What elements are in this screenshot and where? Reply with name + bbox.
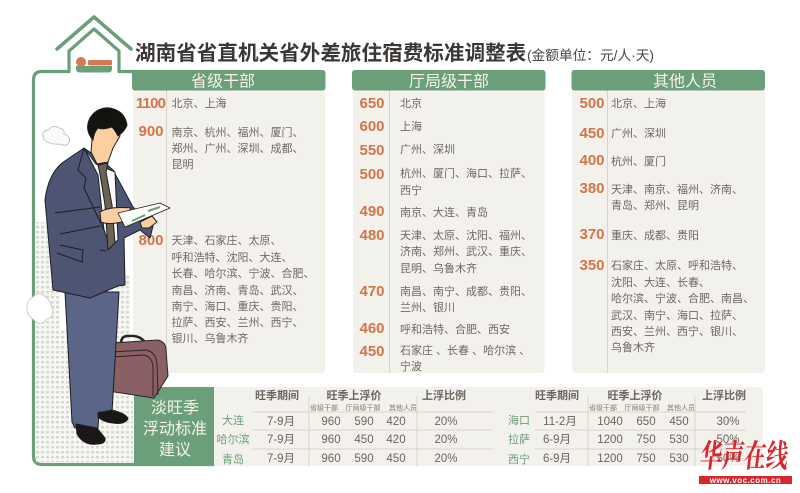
heading: department-level officials bbox=[352, 70, 546, 90]
table rows: right: 50% bbox=[716, 453, 740, 465]
tie bbox=[98, 163, 115, 250]
rates: provincial officials: 南宁、海口、重庆、贵阳、 bbox=[172, 299, 304, 313]
table rows: right: 530 bbox=[669, 453, 689, 465]
table rows: right: 1200 bbox=[597, 434, 623, 446]
table rows: left: 960 bbox=[321, 453, 341, 465]
rates: department-level officials: 南昌、南宁、成都、贵阳、 bbox=[400, 284, 532, 298]
rates: other personnel: 武汉、南宁、海口、拉萨、 bbox=[611, 308, 743, 322]
table rows: left: 420 bbox=[386, 416, 406, 428]
rates: other personnel: 400 bbox=[579, 152, 605, 169]
table rows: right: 30% bbox=[716, 416, 740, 428]
watermark logo: 华声在线 bbox=[698, 430, 792, 476]
table rows: right: 海口 bbox=[508, 413, 530, 427]
rates: other personnel: 500 bbox=[579, 95, 605, 112]
rates: department-level officials: 500 bbox=[359, 166, 385, 183]
rates: other personnel: 380 bbox=[579, 180, 605, 197]
table headers: left: 上浮比例 bbox=[422, 388, 466, 402]
table rows: left: 450 bbox=[386, 453, 406, 465]
illustration: briefcase bbox=[108, 336, 168, 398]
rates: other personnel: 350 bbox=[579, 257, 605, 274]
table rows: left: 20% bbox=[434, 416, 458, 428]
rates: provincial officials: 银川、乌鲁木齐 bbox=[172, 331, 248, 345]
table rows: right: 6-9月 bbox=[543, 453, 571, 465]
rates: provincial officials: 南京、杭州、福州、厦门、 bbox=[172, 125, 304, 139]
table rows: right: 西宁 bbox=[508, 452, 530, 466]
shoes bbox=[76, 410, 128, 444]
panel: other personnel bbox=[572, 70, 765, 373]
rates: department-level officials: 470 bbox=[359, 283, 385, 300]
rates: other personnel bbox=[579, 95, 754, 354]
rates: department-level officials: 石家庄 、长春 、哈尔滨 、 bbox=[400, 343, 530, 357]
table headers: right: 上浮比例 bbox=[702, 388, 746, 402]
rates: other personnel: 广州、深圳 bbox=[611, 127, 666, 140]
house frame bbox=[34, 17, 214, 464]
rates: department-level officials: 600 bbox=[359, 118, 385, 135]
title: 湖南省省直机关省外差旅住宿费标准调整表 bbox=[135, 41, 527, 65]
rates: provincial officials: 1100 bbox=[136, 95, 166, 112]
rates: other personnel: 450 bbox=[579, 125, 605, 142]
heading: department-level officials: 厅局级干部 bbox=[409, 72, 489, 90]
rates: provincial officials bbox=[136, 95, 314, 345]
table rows: left: 20% bbox=[434, 434, 458, 446]
rates: department-level officials: 西宁 bbox=[400, 183, 422, 197]
table rows: right: 拉萨 bbox=[508, 432, 530, 446]
table rows: right: 450 bbox=[669, 416, 689, 428]
rates: department-level officials: 呼和浩特、合肥、西安 bbox=[400, 322, 510, 336]
table rows: left: 7-9月 bbox=[267, 434, 295, 446]
table headers: left: 省级干部 bbox=[310, 403, 338, 412]
table headers: right: 旺季期间 bbox=[535, 388, 579, 402]
watermark logo: www.voc.com.cn bbox=[709, 476, 781, 485]
label box: off-peak floating rates bbox=[134, 387, 214, 466]
table rows: right bbox=[508, 413, 740, 466]
table rows: right: 530 bbox=[669, 434, 689, 446]
rates: department-level officials: 460 bbox=[359, 320, 385, 337]
rates: department-level officials: 480 bbox=[359, 227, 385, 244]
rates: other personnel: 沈阳、大连、长春、 bbox=[611, 275, 710, 289]
rates: other personnel: 杭州、厦门 bbox=[611, 154, 666, 168]
icon: white puff cloud bbox=[27, 294, 53, 323]
table rows: left: 960 bbox=[321, 434, 341, 446]
table rows: left: 590 bbox=[354, 416, 374, 428]
table rows: right: 750 bbox=[636, 453, 656, 465]
rates: other personnel: 哈尔滨、宁波、合肥、南昌、 bbox=[611, 291, 754, 305]
rates: provincial officials: 长春、哈尔滨、宁波、合肥、 bbox=[172, 266, 314, 280]
rates: department-level officials: 650 bbox=[359, 95, 385, 112]
shirt bbox=[84, 148, 118, 246]
rates: department-level officials: 550 bbox=[359, 142, 385, 159]
table rows: left: 960 bbox=[321, 416, 341, 428]
hands and paper bbox=[100, 208, 131, 224]
label box: off-peak floating rates: 浮动标准 bbox=[143, 420, 207, 438]
rates: other personnel: 北京、上海 bbox=[611, 96, 666, 110]
heading: provincial officials: 省级干部 bbox=[191, 72, 255, 90]
rates: department-level officials: 济南、郑州、武汉、重庆、 bbox=[400, 244, 532, 258]
rates: department-level officials: 昆明、乌鲁木齐 bbox=[400, 261, 477, 275]
table headers: right: 省级干部 bbox=[589, 403, 617, 412]
table rows: left: 7-9月 bbox=[267, 416, 295, 428]
table headers: left bbox=[255, 388, 466, 412]
rates: provincial officials: 800 bbox=[138, 232, 164, 249]
rates: provincial officials: 拉萨、西安、兰州、西宁、 bbox=[172, 315, 304, 329]
table headers: left: 旺季上浮价 bbox=[326, 388, 382, 402]
rates: department-level officials: 兰州、银川 bbox=[400, 300, 455, 314]
rates: provincial officials: 900 bbox=[138, 123, 164, 140]
heading: other personnel: 其他人员 bbox=[653, 72, 717, 90]
neck and face bbox=[91, 124, 120, 164]
table headers: right: 厅局级干部 bbox=[624, 403, 660, 412]
table headers: right: 旺季上浮价 bbox=[608, 388, 662, 402]
icon: bed bbox=[76, 57, 112, 72]
rates: provincial officials: 南昌、济南、青岛、武汉、 bbox=[172, 283, 304, 297]
table rows: right: 1040 bbox=[597, 416, 623, 428]
rates: department-level officials: 广州、深圳 bbox=[400, 143, 455, 156]
table headers: right bbox=[535, 388, 746, 412]
table rows: left: 7-9月 bbox=[267, 453, 295, 465]
panel: peak-season table bbox=[214, 387, 763, 466]
hair bbox=[88, 108, 127, 140]
table rows: right: 1200 bbox=[597, 453, 623, 465]
rates: other personnel: 天津、南京、福州、济南、 bbox=[611, 182, 743, 196]
table rows: left: 420 bbox=[386, 434, 406, 446]
rates: provincial officials: 郑州、广州、深圳、成都、 bbox=[172, 141, 304, 155]
table headers: right: 其他人员 bbox=[667, 403, 695, 412]
rates: department-level officials: 宁波 bbox=[400, 359, 422, 373]
table headers: left: 旺季期间 bbox=[255, 388, 299, 402]
table rows: left bbox=[216, 413, 458, 466]
rates: other personnel: 370 bbox=[579, 226, 605, 243]
icon: cloud bbox=[43, 126, 69, 145]
rates: provincial officials: 北京、上海 bbox=[172, 96, 226, 110]
lapels and pocket bbox=[55, 148, 106, 262]
table rows: left: 20% bbox=[434, 453, 458, 465]
heading: provincial officials bbox=[132, 70, 326, 90]
table rows: left: 590 bbox=[354, 453, 374, 465]
jacket bbox=[45, 148, 153, 298]
rates: department-level officials: 杭州、厦门、海口、拉萨、 bbox=[400, 166, 532, 180]
label box: off-peak floating rates: 淡旺季 bbox=[151, 399, 199, 417]
table headers: left: 其他人员 bbox=[389, 403, 417, 412]
rates: provincial officials: 呼和浩特、沈阳、大连、 bbox=[172, 250, 292, 264]
table rows: right: 11-2月 bbox=[543, 416, 577, 428]
trousers bbox=[65, 292, 119, 428]
rates: department-level officials: 450 bbox=[359, 343, 385, 360]
rates: department-level officials: 北京 bbox=[400, 96, 422, 110]
label box: off-peak floating rates: 建议 bbox=[159, 441, 191, 459]
rates: department-level officials bbox=[359, 95, 532, 373]
rates: department-level officials: 上海 bbox=[400, 119, 422, 133]
heading: other personnel bbox=[572, 70, 765, 90]
table rows: left: 大连 bbox=[222, 413, 244, 427]
rates: provincial officials: 昆明 bbox=[172, 158, 194, 171]
title: (金额单位：元/人·天) bbox=[527, 48, 654, 63]
table rows: right: 50% bbox=[716, 434, 740, 446]
rates: other personnel: 西安、兰州、西宁、银川、 bbox=[611, 324, 743, 338]
illustration: businessman bbox=[45, 108, 170, 444]
illustration: city buildings bbox=[36, 222, 133, 462]
table rows: left: 450 bbox=[354, 434, 374, 446]
table rows: right: 6-9月 bbox=[543, 434, 571, 446]
rates: other personnel: 重庆、成都、贵阳 bbox=[611, 228, 699, 242]
rates: other personnel: 石家庄、太原、呼和浩特、 bbox=[611, 258, 743, 272]
panel: provincial officials bbox=[132, 70, 326, 373]
rates: department-level officials: 天津、太原、沈阳、福州、 bbox=[400, 228, 532, 242]
rates: other personnel: 乌鲁木齐 bbox=[611, 340, 655, 354]
table rows: left: 青岛 bbox=[222, 452, 244, 466]
table rows: right: 750 bbox=[636, 434, 656, 446]
rates: provincial officials: 天津、石家庄、太原、 bbox=[172, 233, 282, 247]
panel: department-level officials bbox=[352, 70, 546, 373]
rates: other personnel: 青岛、郑州、昆明 bbox=[611, 198, 699, 212]
rates: department-level officials: 490 bbox=[359, 203, 385, 220]
table headers: left: 厅局级干部 bbox=[346, 403, 380, 412]
rates: department-level officials: 南京、大连、青岛 bbox=[400, 205, 488, 219]
table rows: right: 650 bbox=[636, 416, 656, 428]
table rows: left: 哈尔滨 bbox=[216, 432, 250, 446]
